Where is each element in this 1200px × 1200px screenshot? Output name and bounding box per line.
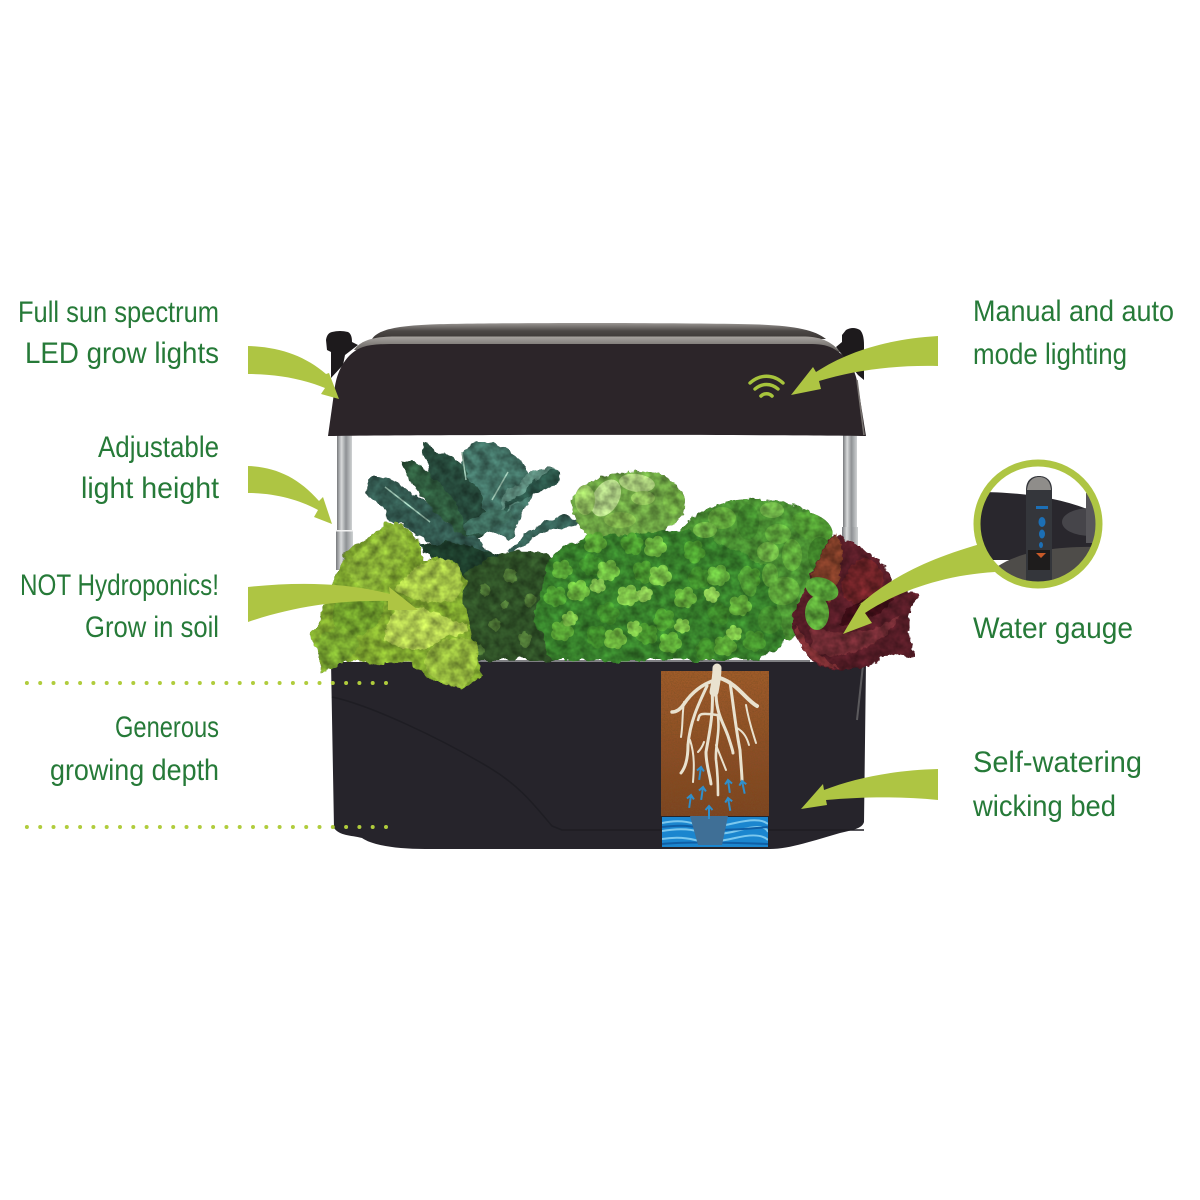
cutaway panel: soil, roots and water [661, 668, 769, 847]
label: Adjustable light height: light height [81, 472, 220, 505]
parsley leaves [541, 529, 769, 666]
label: Adjustable light height [81, 431, 220, 505]
planter rim [400, 660, 810, 662]
label: Water gauge: Water gauge [973, 612, 1133, 645]
lamp hood right edge highlight [857, 380, 864, 435]
label: Manual and auto mode lighting: Manual and auto [973, 295, 1174, 328]
label: Full sun spectrum LED grow lights: LED grow lights [25, 337, 219, 370]
base contour line [332, 697, 864, 830]
label: Self-watering wicking bed: Self-watering [973, 746, 1142, 779]
label: Self-watering wicking bed [972, 746, 1142, 823]
arrow: adjustable light height [248, 466, 332, 524]
thyme [460, 552, 565, 660]
basil, right mass [670, 499, 835, 640]
wicking chamber [690, 816, 728, 845]
kale leaf ribs [385, 452, 508, 522]
lamp top cap [372, 323, 826, 339]
parsley mass [535, 530, 785, 660]
large basil leaves in front [764, 572, 842, 630]
gauge ring [977, 463, 1099, 585]
depth markers: dotted lines [27, 683, 387, 827]
gauge tube [1026, 476, 1052, 586]
label: NOT Hydroponics! Grow in soil: Grow in soil [85, 611, 219, 644]
label: Manual and auto mode lighting: mode lighting [973, 338, 1127, 371]
thyme highlights [475, 568, 550, 655]
butter lettuce [312, 520, 480, 688]
lamp grey band [354, 336, 840, 352]
base right highlight [857, 665, 863, 720]
plant roots [672, 668, 757, 795]
telescopic light pole left [336, 434, 353, 570]
label: Full sun spectrum LED grow lights: Full sun spectrum [18, 296, 219, 329]
label: NOT Hydroponics! Grow in soil: NOT Hydroponics! [20, 569, 219, 602]
label: Generous growing depth [50, 711, 219, 787]
planter base [331, 662, 866, 849]
water rising arrows [686, 767, 748, 819]
arrow: water gauge [843, 544, 995, 634]
arrow: manual and auto lighting [791, 336, 938, 395]
wifi icon [750, 376, 783, 396]
product: grow bed unit [326, 323, 866, 849]
red lettuce [792, 533, 920, 670]
basil, right leaves [693, 502, 837, 634]
water reservoir [662, 817, 768, 847]
knob left [326, 331, 358, 378]
label: NOT Hydroponics! Grow in soil [20, 569, 219, 644]
arrow: not hydroponics [248, 584, 418, 622]
label: Adjustable light height: Adjustable [98, 431, 219, 464]
soil layer [661, 671, 769, 816]
arrow: LED grow lights [248, 346, 339, 399]
lamp hood with grow lights [328, 344, 866, 436]
kale [366, 442, 578, 590]
arrow: self-watering wicking bed [801, 769, 938, 809]
plants [312, 442, 920, 688]
label: Generous growing depth: growing depth [50, 754, 219, 787]
telescopic light pole right [842, 434, 858, 567]
label: Generous growing depth: Generous [115, 711, 219, 744]
water gauge inset [975, 462, 1118, 590]
knob right [836, 328, 864, 380]
label: Full sun spectrum LED grow lights [18, 296, 219, 370]
gauge photo [980, 476, 1096, 582]
label: Self-watering wicking bed: wicking bed [972, 790, 1116, 823]
label: Manual and auto mode lighting [973, 295, 1174, 371]
basil, top cluster [572, 472, 685, 545]
